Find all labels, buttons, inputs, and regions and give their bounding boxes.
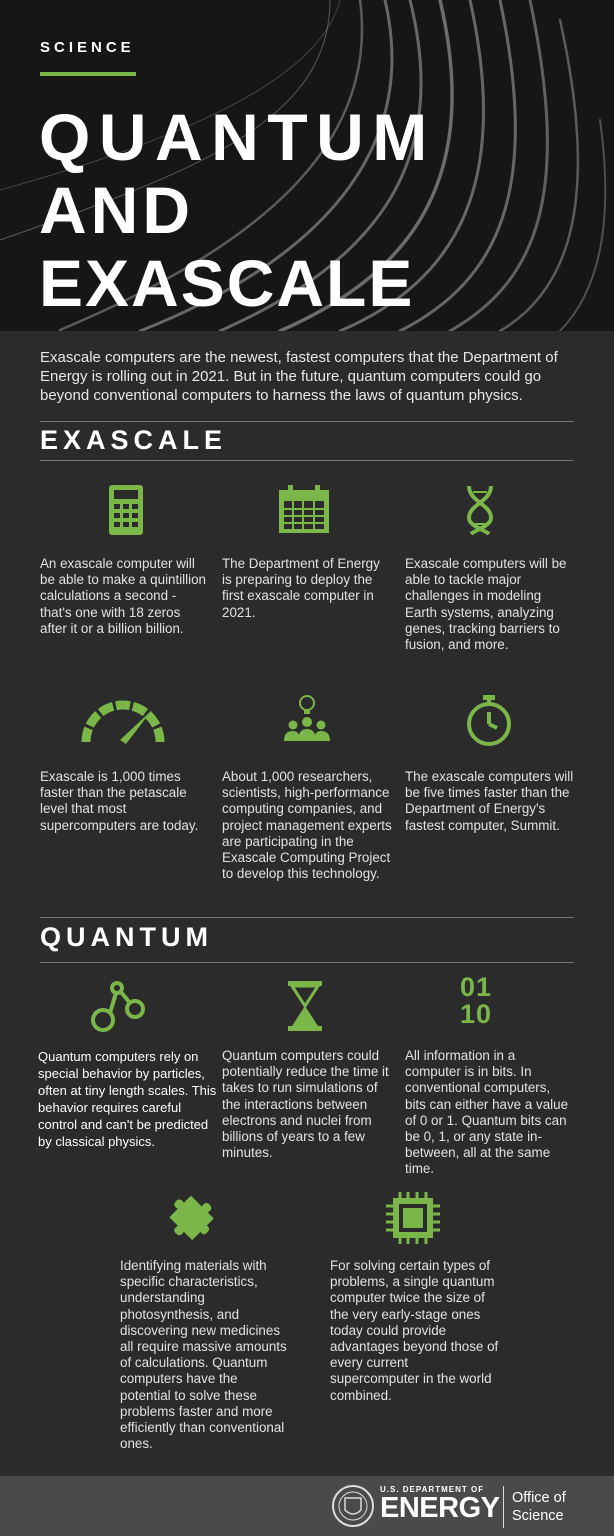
icon: calendar: [279, 485, 329, 533]
icon: binary 01 10: [460, 972, 492, 1029]
icon: speedometer: [82, 700, 164, 744]
text: twice the size: For solving certain types of problems, a single quantum computer twice the size of the very early-stage ones today could provide advantages beyond those of every current supercomputer in the world combined.: [330, 1258, 498, 1403]
text: deploy 2021: The Department of Energy is preparing to deploy the first exascale computer in 2021.: [222, 556, 380, 620]
icon: stopwatch: [467, 695, 511, 746]
title: AND: [39, 173, 194, 247]
text: materials: Identifying materials with specific characteristics, understanding photosynthesis, and discovering new medicines all require massive amounts of calculations. Quantum computers have the potential to solve these problems faster and more efficiently than conventional ones.: [120, 1258, 287, 1451]
title: [39, 100, 436, 320]
logo: Office of Science: Science: [512, 1508, 564, 1524]
footer: [0, 1476, 614, 1536]
title: EXASCALE: [39, 246, 414, 320]
title: QUANTUM: [39, 100, 436, 174]
text: 1,000 times faster: Exascale is 1,000 times faster than the petascale level that most supercomputers are today.: [40, 769, 198, 833]
logo: U.S. Department of Energy: U.S. DEPARTMENT OF: [380, 1485, 484, 1494]
logo: U.S. Department of Energy: ENERGY: [380, 1492, 499, 1524]
icon: puzzle piece: [170, 1196, 214, 1240]
header panel: [0, 0, 614, 331]
icon: DNA: [467, 486, 493, 536]
text: challenges: Exascale computers will be able to tackle major challenges in modeling Earth systems, analyzing genes, tracking barriers to fusion, and more.: [405, 556, 566, 652]
icon: molecule: [91, 981, 145, 1032]
logo: Office of Science: [512, 1490, 566, 1524]
logo: Office of Science: Office of: [512, 1490, 566, 1506]
icon: binary 01 10: 01: [460, 972, 492, 1002]
kicker: SCIENCE: SCIENCE: [40, 39, 135, 56]
text: bits: All information in a computer is in bits. In conventional computers, bits can either have a value of 0 or 1. Quantum bits can be 0, 1, or any state in-between, all at the same time.: [405, 1048, 568, 1176]
text: simulations: Quantum computers could potentially reduce the time it takes to run simulations of the interactions between electrons and nuclei from billions of years to a few minutes.: [222, 1048, 389, 1160]
text: special behavior: Quantum computers rely on special behavior by particles, often at tiny length scales. This behavior requires careful control and can't be predicted by classical physics.: [38, 1049, 216, 1149]
icon: chip: [386, 1192, 440, 1244]
text: five times faster: The exascale computers will be five times faster than the Department of Energy's fastest computer, Summit.: [405, 769, 573, 833]
heading: EXASCALE: EXASCALE: [40, 425, 227, 455]
icon: people with lightbulb: [284, 695, 330, 741]
heading: QUANTUM: QUANTUM: [40, 922, 213, 952]
intro text: Exascale computers are the newest, fastest computers that the Department of Energy is rolling out in 2021. But in the future, quantum computers could go beyond conventional computers to harness the laws of quantum physics.: [40, 349, 558, 404]
icon: hourglass: [288, 981, 322, 1031]
icon: calculator: [109, 485, 143, 535]
icon: binary 01 10: 10: [460, 999, 492, 1029]
text: quintillion: An exascale computer will be able to make a quintillion calculations a second - that's one with 18 zeros after it or a billion billion.: [40, 556, 206, 636]
logo: DOE seal: [332, 1485, 374, 1527]
text: researchers: About 1,000 researchers, scientists, high-performance computing companies, and project management experts are participating in the Exascale Computing Project to develop this technology.: [222, 769, 392, 881]
